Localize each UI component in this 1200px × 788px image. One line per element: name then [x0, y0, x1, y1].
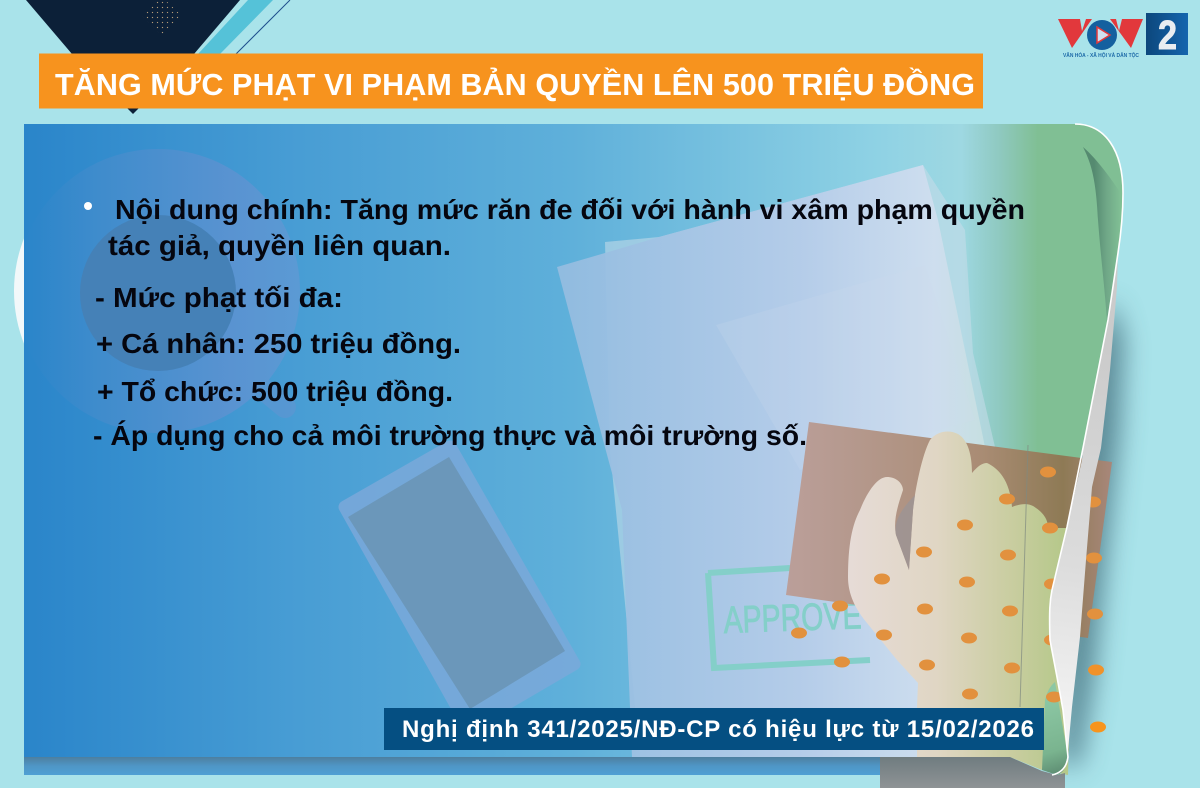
- title banner: TĂNG MỨC PHẠT VI PHẠM BẢN QUYỀN LÊN 500 TRIỆU ĐỒNG: [55, 66, 975, 102]
- line: maximum fine: - Mức phạt tối đa:: [95, 282, 343, 313]
- line: individual: + Cá nhân: 250 triệu đồng.: [96, 328, 461, 359]
- logo: VOV2: VĂN HÓA - XÃ HỘI VÀ DÂN TỘC: [1063, 51, 1139, 59]
- green corner under fold: [1042, 682, 1068, 775]
- icon: magnifying glass: [71, 149, 300, 433]
- bullet: [84, 202, 92, 210]
- text block: main content: [84, 194, 1025, 451]
- curl shadow: [1060, 300, 1124, 765]
- panel bottom shadow strip: [24, 757, 884, 775]
- page curl white outline: [1050, 124, 1123, 775]
- decoration: top-left geometric shapes: [26, 0, 290, 114]
- illustration: documents: [557, 165, 1018, 757]
- fold shadow in the green edge: [1083, 147, 1122, 322]
- grey shadow block at bottom: [880, 757, 1065, 788]
- line: scope: - Áp dụng cho cả môi trường thực và môi trường số.: [93, 420, 807, 451]
- illustration: hand: [848, 432, 1075, 775]
- thin vertical crease line: [1020, 445, 1028, 707]
- icon: smartphone: [345, 447, 574, 726]
- title banner: [39, 54, 983, 108]
- illustration: approved stamp mark: [708, 568, 870, 668]
- line: organization: + Tổ chức: 500 triệu đồng.: [97, 376, 453, 407]
- panel: main content background: [24, 124, 1123, 775]
- footer banner: decree: Nghị định 341/2025/NĐ-CP có hiệu lực từ 15/02/2026: [402, 716, 1034, 743]
- decoration: white circle edge behind panel: [14, 147, 302, 435]
- hand shadow between thumb and finger: [895, 495, 915, 570]
- logo: VOV2: [1058, 12, 1188, 59]
- footer banner: decree: [384, 708, 1044, 750]
- illustration: stamp pad: [786, 422, 1112, 638]
- orange dot grid: [791, 466, 1106, 732]
- page curl: [1050, 253, 1118, 775]
- line: continuation: tác giả, quyền liên quan.: [108, 230, 451, 261]
- logo: VOV2: 2: [1158, 12, 1177, 58]
- illustration: approved stamp mark: APPROVE: [723, 595, 862, 642]
- line: main content: Nội dung chính: Tăng mức răn đe đối với hành vi xâm phạm quyền: [115, 194, 1025, 225]
